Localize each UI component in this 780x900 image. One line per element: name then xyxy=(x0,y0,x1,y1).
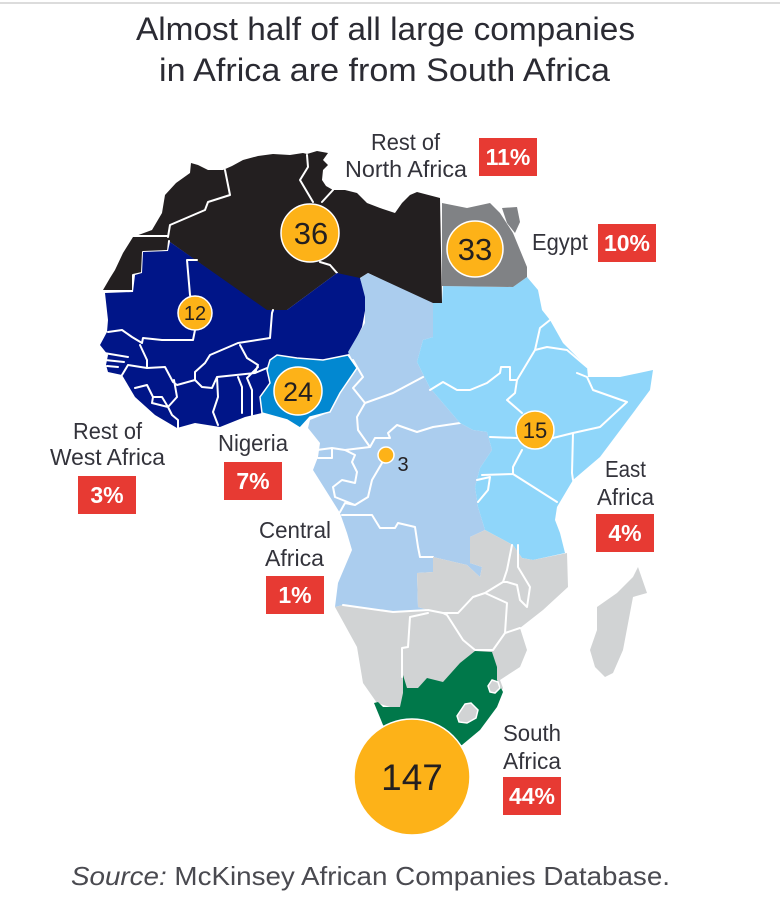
label: Central Africa xyxy=(259,517,331,614)
region: Nigeria xyxy=(260,355,357,428)
region: Egypt xyxy=(442,203,527,287)
bubble: West Africa 12 xyxy=(178,296,212,330)
label: East Africa: 4% xyxy=(608,520,642,546)
bubble: South Africa 147: 147 xyxy=(381,757,443,798)
region: Central Africa xyxy=(308,273,492,612)
title: Almost half of all large companies xyxy=(136,11,635,47)
label: South Africa: Africa xyxy=(503,748,561,774)
label: Nigeria: Nigeria xyxy=(218,430,288,456)
label: East Africa xyxy=(596,456,654,552)
label: Central Africa: 1% xyxy=(278,582,312,608)
label: East Africa: East xyxy=(605,456,647,482)
label: Rest of West Africa: 3% xyxy=(90,482,124,508)
region: rest of North Africa xyxy=(103,151,442,311)
bubble: North Africa 36 xyxy=(281,204,339,262)
label: Nigeria xyxy=(218,430,288,500)
bubble: East Africa 15: 15 xyxy=(523,418,547,443)
label: Egypt: 10% xyxy=(604,230,650,256)
bubble: Nigeria 24: 24 xyxy=(283,377,313,407)
label: Rest of West Africa xyxy=(50,418,165,514)
label: Egypt: Egypt xyxy=(532,229,589,255)
label: South Africa: 44% xyxy=(509,783,555,809)
title: in Africa are from South Africa xyxy=(159,52,610,88)
bubble: Central Africa 3: 3 xyxy=(397,454,409,476)
title xyxy=(136,11,635,88)
label: Rest of North Africa: 11% xyxy=(486,144,530,170)
island: Madagascar xyxy=(590,567,647,677)
label: East Africa: Africa xyxy=(597,484,654,510)
label: Rest of North Africa: North Africa xyxy=(345,156,467,182)
region: East Africa xyxy=(417,277,653,560)
label: Rest of North Africa xyxy=(345,129,537,182)
bubble: Nigeria 24 xyxy=(274,367,322,415)
label: Rest of North Africa: Rest of xyxy=(371,129,441,155)
bubble: East Africa 15 xyxy=(516,411,554,449)
region: rest of West Africa xyxy=(100,242,367,428)
map of Africa xyxy=(100,151,653,760)
label: Central Africa: Central xyxy=(259,517,331,543)
label: Nigeria: 7% xyxy=(236,468,270,494)
bubble: West Africa 12: 12 xyxy=(184,303,206,325)
label: South Africa xyxy=(503,720,561,815)
bubble: Egypt 33: 33 xyxy=(458,232,492,267)
label: Egypt xyxy=(532,224,656,262)
label: Rest of West Africa: Rest of xyxy=(73,418,143,444)
region: southern Africa (grey) xyxy=(335,530,647,730)
bubble: Egypt 33 xyxy=(447,221,503,277)
bubble: South Africa 147 xyxy=(354,719,470,835)
label: South Africa: South xyxy=(503,720,561,746)
bubble: Central Africa 3 xyxy=(378,447,409,476)
label: Rest of West Africa: West Africa xyxy=(50,444,165,470)
source note: Source: McKinsey African Companies Database. xyxy=(71,861,670,891)
region: South Africa xyxy=(374,651,503,760)
bubble: North Africa 36: 36 xyxy=(294,216,328,251)
label: Central Africa: Africa xyxy=(265,545,324,571)
